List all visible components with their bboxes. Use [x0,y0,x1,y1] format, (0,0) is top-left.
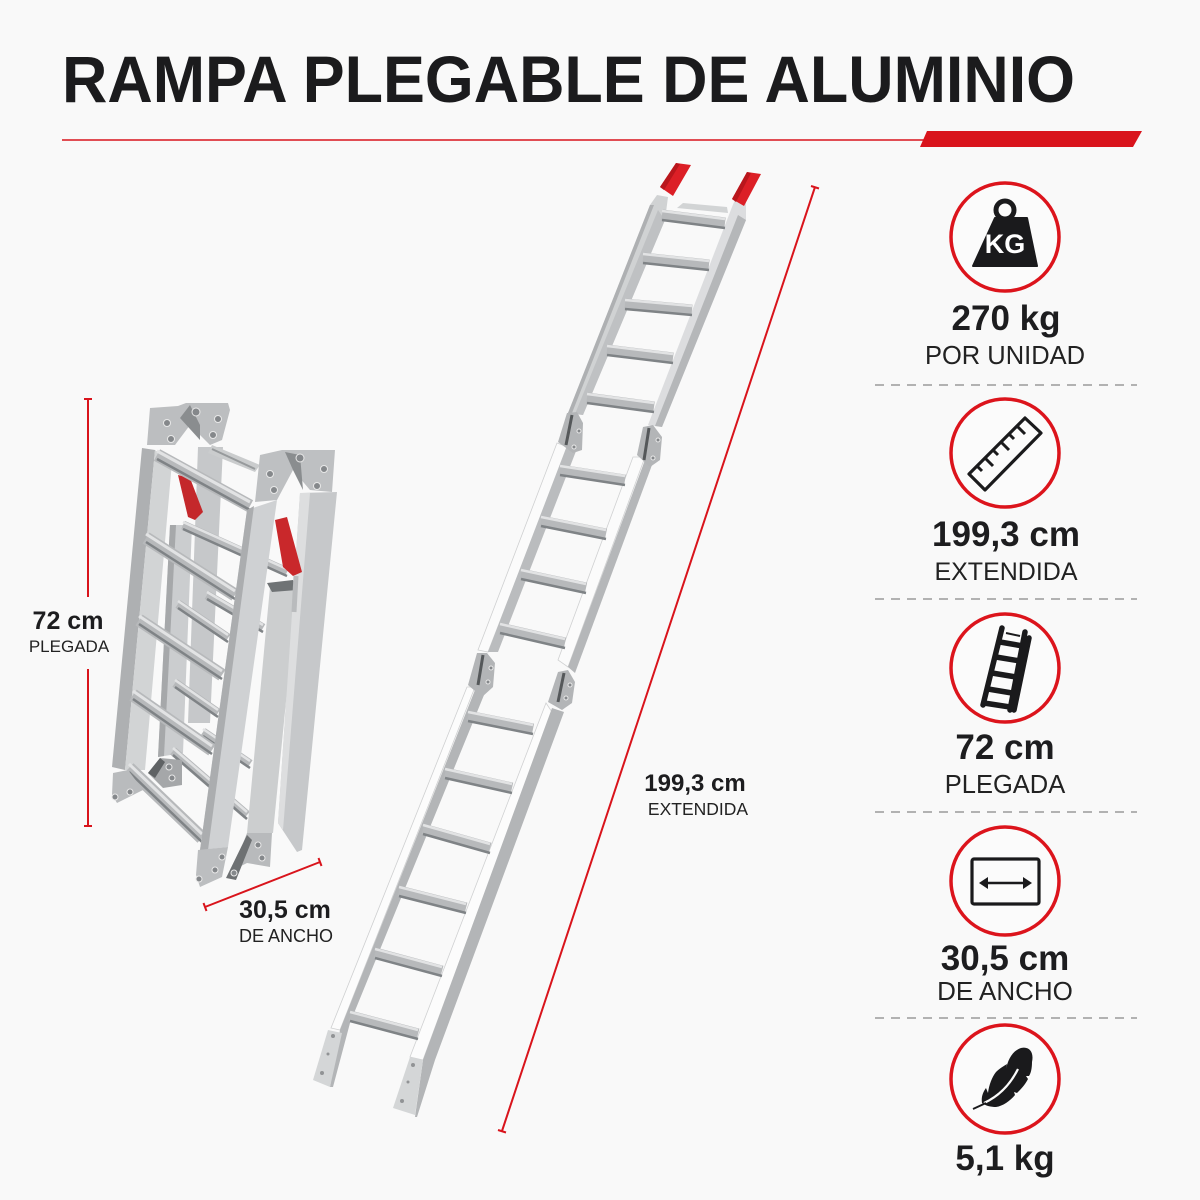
height label: 72 cm [33,607,103,635]
width label: 30,5 cm [239,896,331,924]
icon: ruler [951,399,1059,507]
red handle, front [275,517,302,576]
front rungs [129,451,250,842]
title: RAMPA PLEGABLE DE ALUMINIO [62,42,1075,116]
front left rail [112,448,172,770]
back rungs of folded ramp [173,522,287,819]
stat: extended length [932,515,1080,586]
icon: width [951,827,1059,935]
height label [29,607,110,656]
back rails of folded ramp [158,447,223,757]
title rule with red accent [62,131,1142,147]
left rail, three sections [330,195,668,1087]
height label: PLEGADA [29,637,110,656]
top hinge, right [255,450,335,502]
height dimension line [84,399,92,826]
icon: weight capacity [951,183,1059,291]
red handle, rear [178,475,203,520]
lower hinges [468,653,575,710]
back top rung [208,445,260,472]
top hinge, left [147,403,230,445]
stat: load: POR UNIDAD [925,342,1085,370]
icon: weight capacity: KG [985,229,1025,259]
length dimension line [498,186,819,1132]
foot plates [313,1030,423,1115]
stat: weight: 5,1 kg [955,1139,1055,1178]
icon: folded ladder [951,614,1059,722]
stat: folded length: 72 cm [955,728,1055,767]
length label: EXTENDIDA [648,799,748,819]
stat: width [937,939,1073,1006]
rungs [350,211,725,1039]
right rail, three sections [410,195,746,1117]
stat: extended length: EXTENDIDA [934,558,1078,586]
folded ramp photo [112,403,337,887]
length label: 199,3 cm [644,770,746,797]
stat: folded length [945,728,1065,799]
back plate [677,203,728,213]
upper hinges [558,412,662,467]
extended ramp photo [313,163,761,1117]
icon: feather [951,1025,1059,1133]
stat: load: 270 kg [952,299,1060,338]
stat: load [925,299,1085,370]
stat: width: DE ANCHO [937,976,1073,1006]
stat: extended length: 199,3 cm [932,515,1080,554]
handle latch [294,576,296,612]
rail C [247,587,297,833]
bottom hinges [112,758,272,887]
stat: width: 30,5 cm [941,939,1069,978]
stat: folded length: PLEGADA [945,771,1065,799]
front right rail [200,500,277,850]
rail C top slot [267,580,297,592]
red handles [660,163,761,206]
width label: DE ANCHO [239,926,333,946]
rail D [278,492,337,852]
width label [239,896,333,946]
length label [644,770,748,819]
width dimension line [204,858,322,911]
